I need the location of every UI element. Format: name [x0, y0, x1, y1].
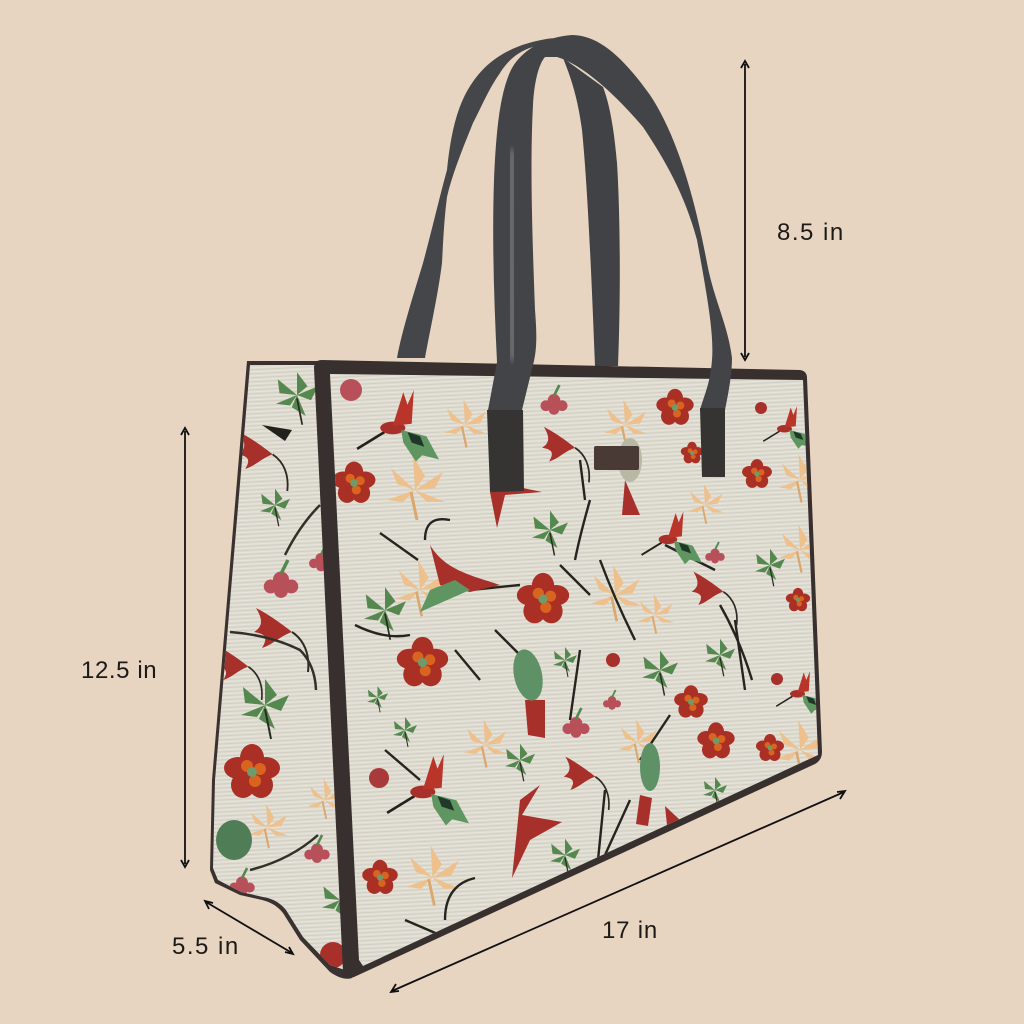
logo patch [594, 446, 639, 470]
dimension: bag depth [172, 901, 293, 960]
dimension: bag depth: 5.5 in [172, 933, 240, 960]
bag front panel [314, 360, 826, 978]
dimension: bag width [391, 791, 845, 992]
dimension: bag width: 17 in [602, 917, 658, 944]
stems [355, 460, 752, 935]
tan sprigs [387, 456, 445, 520]
back handle [397, 38, 620, 366]
dimension: handle height [741, 61, 845, 360]
hummingbirds [357, 390, 439, 462]
front handle [487, 35, 732, 492]
bag side panel [210, 361, 358, 979]
green sprigs [364, 587, 406, 640]
side panel floral pattern [216, 372, 343, 968]
right strap tab [700, 408, 725, 477]
dimension: bag height: 12.5 in [81, 657, 157, 684]
dimension: handle height: 8.5 in [777, 219, 845, 246]
left strap tab [487, 410, 524, 492]
front panel floral pattern [333, 379, 826, 936]
pink blossoms [540, 385, 568, 415]
red flowers [333, 462, 375, 503]
tulips [542, 427, 589, 482]
dimension: bag height [81, 428, 189, 867]
left strap highlight [511, 150, 513, 360]
